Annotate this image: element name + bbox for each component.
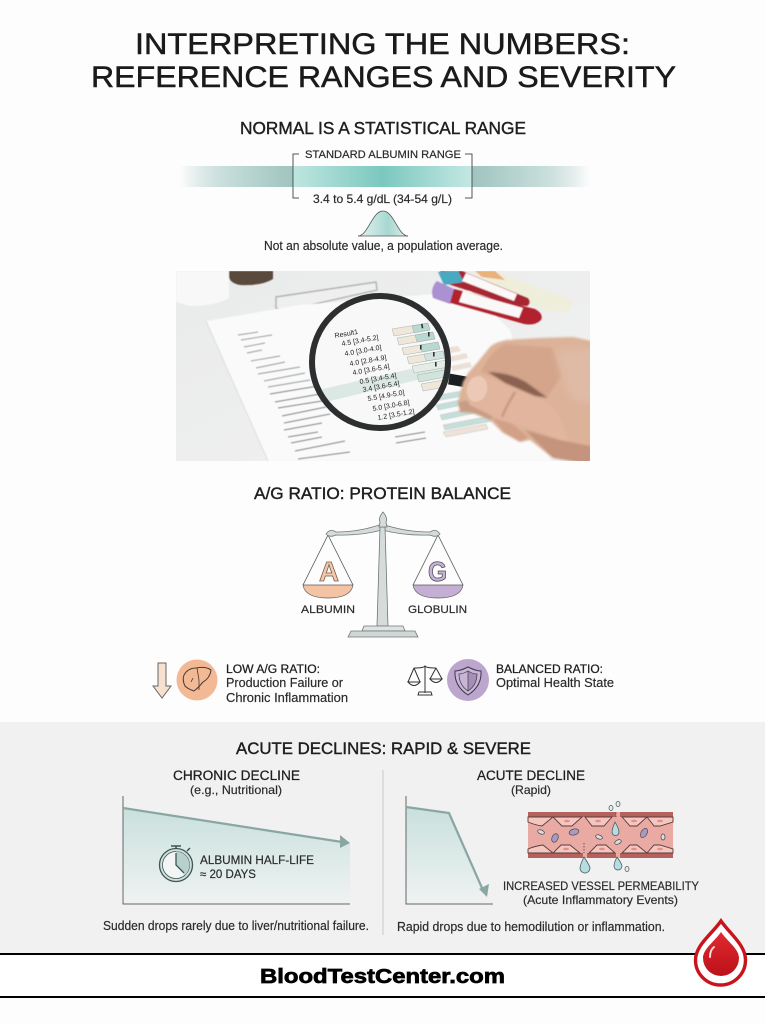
label globulin: GLOBULIN <box>408 604 467 616</box>
footer site name: BloodTestCenter.com <box>260 966 505 988</box>
caption: population average: Not an absolute value, a population average. <box>264 239 503 253</box>
beam <box>326 524 440 536</box>
title: REFERENCE RANGES AND SEVERITY <box>91 61 676 94</box>
balanced ratio text <box>496 664 614 690</box>
icon: liver <box>176 660 218 700</box>
chronic heading: (e.g., Nutritional) <box>190 783 282 797</box>
lens view: 5.5 [4.9-5.0] <box>367 390 405 403</box>
heading: acute declines: ACUTE DECLINES: RAPID & SEVERE <box>236 740 531 758</box>
half-life text: ≈ 20 DAYS <box>200 869 256 881</box>
balanced ratio text: Optimal Health State <box>496 676 614 690</box>
low ratio text: LOW A/G RATIO: <box>226 664 320 676</box>
heading: A/G ratio: A/G RATIO: PROTEIN BALANCE <box>254 485 511 503</box>
base <box>362 626 405 631</box>
low ratio text: Production Failure or <box>226 676 343 690</box>
lens view: 1.2 [3.5-1.2] <box>377 409 415 422</box>
icon: bell curve <box>358 211 408 236</box>
magnifier rim and handle <box>312 296 448 428</box>
letter A: A <box>319 556 339 587</box>
label albumin: ALBUMIN <box>301 604 355 616</box>
acute decline column <box>397 768 699 934</box>
title: INTERPRETING THE NUMBERS: <box>135 28 630 61</box>
lens view <box>322 322 445 420</box>
acute heading <box>477 768 585 797</box>
panel: acute declines <box>0 722 765 954</box>
chronic heading <box>173 768 300 797</box>
icon: stopwatch <box>160 846 192 882</box>
vessel label: INCREASED VESSEL PERMEABILITY <box>503 881 699 893</box>
acute decline chart <box>406 796 493 904</box>
heading: normal is a statistical range: NORMAL IS A STATISTICAL RANGE <box>240 118 526 138</box>
balance scale <box>301 512 467 637</box>
footer <box>0 921 765 998</box>
acute caption: Rapid drops due to hemodilution or inflammation. <box>397 920 665 934</box>
lens view: 4.0 [3.0-4.0] <box>344 345 382 358</box>
hand <box>458 337 600 466</box>
half-life text <box>200 855 314 881</box>
lens view: 4.0 [3.6-5.4] <box>352 364 390 377</box>
acute heading: ACUTE DECLINE <box>477 768 585 783</box>
low ratio text <box>226 664 348 705</box>
photo: magnifying glass over lab report <box>176 271 600 466</box>
lens view: 3.4 [3.6-5.4] <box>362 381 400 394</box>
vessel illustration <box>528 802 673 873</box>
vessel label <box>503 881 699 907</box>
chronic decline chart <box>123 796 350 904</box>
balanced ratio text: BALANCED RATIO: <box>496 664 603 676</box>
icon: shield <box>447 659 489 701</box>
acute heading: (Rapid) <box>511 783 551 797</box>
vessel label: (Acute Inflammatory Events) <box>523 893 678 907</box>
callout: low A/G ratio <box>153 660 348 705</box>
range bar: 3.4 to 5.4 g/dL (34-54 g/L) <box>313 192 452 206</box>
icon: small scale <box>408 666 442 695</box>
chronic caption: Sudden drops rarely due to liver/nutritional failure. <box>103 919 369 933</box>
callout: balanced ratio <box>408 659 614 701</box>
lens view: 5.0 [3.0-6.8] <box>372 400 410 413</box>
right pan <box>413 585 463 598</box>
lens view: Result1 <box>334 329 359 340</box>
chronic decline column <box>103 768 369 933</box>
blood tubes <box>472 271 572 312</box>
lens view: 4.0 [2.8-4.9] <box>349 355 387 368</box>
icon: down arrow <box>153 663 171 698</box>
low ratio text: Chronic Inflammation <box>226 691 348 705</box>
range bar <box>180 149 590 206</box>
half-life text: ALBUMIN HALF-LIFE <box>200 855 314 867</box>
left pan <box>303 585 353 598</box>
title <box>91 28 676 94</box>
post <box>377 527 388 626</box>
chronic heading: CHRONIC DECLINE <box>173 768 300 783</box>
lens view: 4.5 [3.4-5.2] <box>341 335 379 348</box>
lens view: 0.5 [3.4-5.4] <box>359 373 397 386</box>
range bar: STANDARD ALBUMIN RANGE <box>305 149 461 161</box>
letter G: G <box>428 556 447 587</box>
icon: blood drop logo <box>696 921 746 985</box>
